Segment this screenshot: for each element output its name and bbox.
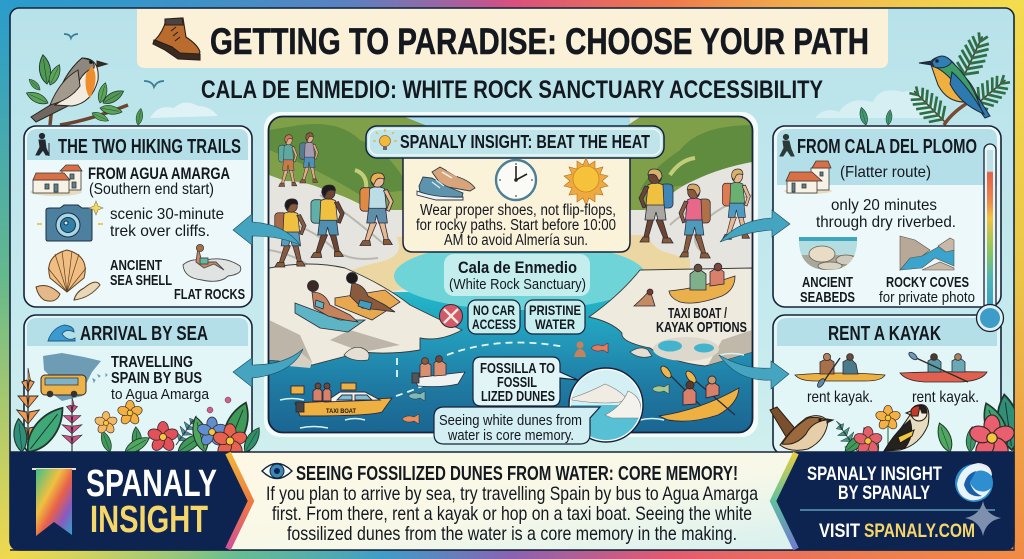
text: Spanaly Insight by Spanaly: BY SPANALY bbox=[838, 483, 930, 504]
thermometer bbox=[976, 144, 1004, 332]
icon: sparkle bbox=[965, 501, 1001, 536]
icon: village houses bbox=[30, 165, 82, 196]
swimmer and fish bbox=[402, 342, 669, 424]
text: rocky coves: for private photo bbox=[879, 289, 975, 306]
badge: no car access: ACCESS bbox=[472, 316, 516, 332]
icon: ancient seabed bbox=[799, 237, 857, 271]
title banner bbox=[137, 9, 888, 68]
icon: camera bbox=[37, 201, 103, 241]
speech bubble: core memory caption bbox=[434, 407, 600, 444]
heading: beat the heat: SPANALY INSIGHT: BEAT THE HEAT bbox=[400, 131, 651, 152]
text: 20 minutes through dry riverbed: only 20 minutes bbox=[831, 197, 937, 214]
panel: arrival by sea bbox=[24, 315, 252, 455]
icon: white houses bbox=[784, 161, 832, 194]
badge: pristine water bbox=[525, 300, 585, 334]
small motor boat bbox=[412, 356, 465, 387]
speech bubble: fossil dunes: LIZED DUNES bbox=[481, 389, 555, 405]
text: insight advice bbox=[416, 202, 616, 249]
text: travelling Spain by bus: SPAIN BY BUS bbox=[111, 370, 202, 387]
text: Spanaly Insight by Spanaly: SPANALY INSIGHT bbox=[807, 464, 942, 485]
text: insight advice: AM to avoid Almería sun. bbox=[444, 232, 588, 249]
text: ancient seabeds: ANCIENT bbox=[802, 274, 853, 291]
label: taxi boat / kayak options: KAYAK OPTIONS bbox=[656, 319, 747, 336]
illustration: blue bird on pine bbox=[858, 29, 1015, 131]
subtitle: CALA DE ENMEDIO: WHITE ROCK SANCTUARY ACCESSIBILITY bbox=[201, 76, 823, 104]
badge: no car access bbox=[468, 300, 520, 334]
panel: from Cala del Plomo bbox=[773, 126, 1001, 307]
panel header: rent a kayak bbox=[777, 318, 997, 346]
icon: rocky coves bbox=[900, 236, 954, 270]
panel header: two hiking trails bbox=[27, 129, 248, 160]
icon: yellow kayak bbox=[795, 353, 885, 389]
illustration: robin on branch bbox=[25, 54, 144, 126]
badge: pristine water: WATER bbox=[535, 316, 575, 332]
panel header: from Cala del Plomo bbox=[777, 129, 997, 185]
center insight text: first. From there, rent a kayak or hop on a taxi boat. Seeing the white bbox=[272, 503, 752, 525]
text: rocky coves: ROCKY COVES bbox=[886, 274, 969, 291]
center insight text: SEEING FOSSILIZED DUNES FROM WATER: CORE MEMORY! bbox=[296, 463, 738, 485]
insight card bbox=[366, 126, 664, 252]
text: visit spanaly.com: SPANALY.COM bbox=[864, 521, 975, 542]
speech bubble: core memory caption: Seeing white dunes from bbox=[439, 412, 582, 429]
icon: red kayak bbox=[900, 351, 987, 382]
text: flatter route: (Flatter route) bbox=[840, 164, 931, 181]
text: Spanaly Insight by Spanaly bbox=[807, 464, 942, 504]
arrow: to arrival by sea bbox=[233, 349, 303, 387]
icon: flat rock with sunbather bbox=[183, 244, 241, 281]
icon: map of Spain with bus bbox=[41, 353, 107, 401]
text: brand name: SPANALY bbox=[86, 463, 217, 505]
center insight text: fossilized dunes from the water is a core memory in the making. bbox=[287, 523, 737, 545]
text: ancient seabeds bbox=[800, 274, 855, 306]
panel: the two hiking trails bbox=[24, 126, 252, 307]
text: brand name bbox=[86, 463, 217, 541]
speech bubble: fossil dunes bbox=[473, 357, 578, 406]
speech bubble: fossil dunes: FOSSIL bbox=[497, 375, 537, 391]
text: rocky coves bbox=[879, 274, 975, 306]
icon: sea shells bbox=[36, 250, 100, 301]
hikers right group bbox=[639, 169, 750, 258]
icon: lightbulb bbox=[373, 129, 397, 150]
text: insight advice: for rocky paths. Start before 10:00 bbox=[416, 217, 616, 234]
title banner: GETTING TO PARADISE: CHOOSE YOUR PATH bbox=[210, 21, 869, 62]
label: Cala de Enmedio: (White Rock Sanctuary) bbox=[449, 276, 586, 293]
scene background bbox=[269, 117, 752, 432]
text: ancient sea shell bbox=[110, 258, 172, 289]
panel header: arrival by sea: ARRIVAL BY SEA bbox=[80, 323, 208, 345]
text: ancient sea shell: SEA SHELL bbox=[110, 273, 172, 289]
text: scenic trek: scenic 30-minute bbox=[110, 206, 224, 223]
center insight text: If you plan to arrive by sea, try travelling Spain by bus to Agua Amarga bbox=[266, 483, 758, 505]
illustration: goldfinch bbox=[884, 405, 929, 451]
icon: walking shoes bbox=[417, 167, 475, 200]
icon: eye bbox=[262, 464, 292, 478]
text: ancient sea shell: ANCIENT bbox=[110, 258, 162, 274]
text: visit spanaly.com: VISIT bbox=[819, 521, 860, 542]
panel: rent a kayak bbox=[773, 315, 1001, 455]
arrow: to rent a kayak bbox=[719, 355, 789, 389]
arrow: to hiking trails bbox=[233, 214, 300, 245]
center insight text bbox=[262, 463, 758, 545]
bottom band bbox=[10, 452, 1014, 550]
left banner: Spanaly Insight bbox=[10, 452, 251, 550]
speech bubble: fossil dunes: FOSSILLA TO bbox=[480, 361, 555, 377]
text: scenic trek bbox=[110, 206, 224, 240]
text: flat rocks: FLAT ROCKS bbox=[174, 286, 245, 303]
text: 20 minutes through dry riverbed bbox=[816, 197, 956, 231]
text: travelling Spain by bus: TRAVELLING bbox=[111, 354, 193, 371]
icon: wave logo bbox=[955, 463, 993, 502]
icon: hiking boot bbox=[153, 18, 200, 60]
foliage bottom right bbox=[836, 393, 1014, 452]
text: insight advice: Wear proper shoes, not flip-flops, bbox=[420, 202, 616, 219]
icon: sun bbox=[564, 158, 608, 205]
right banner: visit Spanaly bbox=[773, 452, 1014, 550]
label: taxi boat / kayak options: TAXI BOAT / bbox=[668, 305, 728, 322]
text: visit spanaly.com bbox=[819, 521, 975, 542]
sunbathers on towels bbox=[295, 272, 400, 332]
badge: pristine water: PRISTINE bbox=[529, 302, 581, 318]
dashed routes bbox=[396, 342, 565, 396]
text: scenic trek: trek over cliffs. bbox=[110, 223, 210, 240]
center scene illustration bbox=[264, 112, 758, 444]
text: travelling Spain by bus: to Agua Amarga bbox=[111, 386, 210, 403]
taxi boat: TAXI BOAT bbox=[326, 408, 356, 415]
panel header: arrival by sea bbox=[27, 318, 248, 346]
text: rent kayak labels bbox=[807, 389, 979, 406]
text: from Agua Amarga: FROM AGUA AMARGA bbox=[88, 165, 230, 183]
hikers left group bbox=[275, 133, 393, 267]
speech bubble: core memory caption: water is core memory. bbox=[447, 427, 574, 444]
text: rent kayak labels: rent kayak. bbox=[807, 389, 873, 406]
foliage bottom left bbox=[12, 368, 264, 459]
illustration: wren bbox=[770, 407, 833, 450]
icon: walker bbox=[780, 134, 794, 156]
icon: no car bbox=[440, 304, 462, 328]
text: ancient seabeds: SEABEDS bbox=[800, 289, 855, 306]
icon: hiker bbox=[36, 133, 49, 156]
text: rent kayak labels: rent kayak. bbox=[912, 389, 979, 406]
lens: fossilized dunes view bbox=[569, 368, 643, 442]
text: brand name: INSIGHT bbox=[90, 499, 208, 541]
label: Cala de Enmedio bbox=[444, 254, 590, 296]
badge: no car access: NO CAR bbox=[473, 302, 515, 318]
label: taxi boat / kayak options bbox=[656, 305, 747, 336]
text: travelling Spain by bus bbox=[111, 354, 210, 403]
icon: rainbow ribbon bbox=[32, 469, 76, 536]
panel header: rent a kayak: RENT A KAYAK bbox=[828, 322, 941, 345]
icon: wave bbox=[48, 325, 75, 341]
yellow kayak with paddlers bbox=[659, 364, 739, 421]
text: from Agua Amarga: (Southern end start) bbox=[89, 181, 214, 198]
icon: clock bbox=[496, 160, 536, 200]
kayak on rock with two people bbox=[634, 263, 735, 306]
text: 20 minutes through dry riverbed: through dry riverbed. bbox=[816, 214, 956, 231]
text: from Agua Amarga bbox=[88, 165, 230, 198]
taxi boat bbox=[291, 383, 392, 416]
small birds bbox=[64, 34, 164, 87]
arrow: to Cala del Plomo bbox=[720, 210, 790, 242]
panel header: two hiking trails: THE TWO HIKING TRAILS bbox=[58, 136, 241, 158]
label: Cala de Enmedio: Cala de Enmedio bbox=[458, 258, 577, 277]
